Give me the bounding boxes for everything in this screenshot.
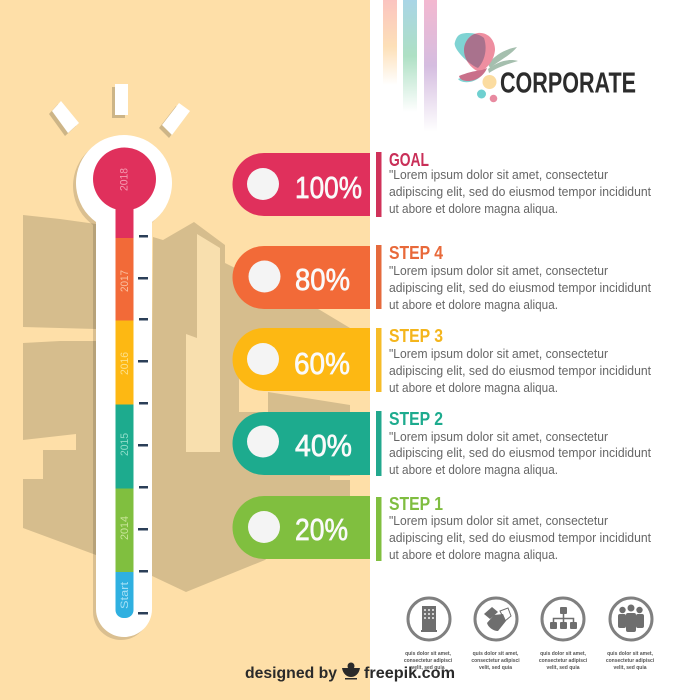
orange segment xyxy=(116,238,134,321)
caption 2: consectetur adipisci xyxy=(471,658,520,664)
text block: step 4: adipiscing elit, sed do eiusmod tempor incididunt xyxy=(389,281,652,295)
text block: step 4 xyxy=(376,243,652,312)
blue segment xyxy=(116,572,134,618)
pill: goal 100% xyxy=(233,153,370,216)
goal bulb xyxy=(93,148,156,210)
icon: freepik logo xyxy=(342,662,360,680)
red segment xyxy=(116,200,134,238)
year labels: 2014 xyxy=(119,516,131,540)
text block: step 1: STEP 1 xyxy=(389,494,443,514)
caption 3: consectetur adipisci xyxy=(539,658,588,664)
thermometer shadow xyxy=(73,138,169,640)
text block: step 3: "Lorem ipsum dolor sit amet, consectetur xyxy=(389,347,608,361)
logo xyxy=(455,33,636,102)
yellow segment xyxy=(116,320,134,404)
caption 4: consectetur adipisci xyxy=(606,658,655,664)
top gradient stripes xyxy=(383,0,437,132)
left background panel xyxy=(0,0,370,700)
caption 1: velit, sed quia xyxy=(411,665,445,671)
text block: step 4: ut abore et dolore magna aliqua. xyxy=(389,298,558,312)
pill: step 1 20%: 20% xyxy=(295,512,348,547)
pill: step 1 20% xyxy=(233,496,370,559)
year labels: 2015 xyxy=(119,433,131,456)
text block: step 2: "Lorem ipsum dolor sit amet, consectetur xyxy=(389,430,608,444)
caption 1: quis dolor sit amet, xyxy=(405,651,452,657)
pill: step 4 80% xyxy=(233,246,370,309)
attribution: freepik.com xyxy=(364,665,455,682)
teal segment xyxy=(116,404,134,488)
decorative rays xyxy=(49,84,190,138)
caption 2 xyxy=(471,651,520,671)
caption 4 xyxy=(606,651,655,671)
green segment xyxy=(116,488,134,572)
attribution: designed by xyxy=(245,665,337,682)
text block: step 1: ut abore et dolore magna aliqua. xyxy=(389,548,558,562)
text block: goal: GOAL xyxy=(389,150,429,170)
icon: people group xyxy=(610,598,652,640)
year labels: 2018 xyxy=(118,168,130,191)
icon: office building xyxy=(408,598,450,640)
text block: step 2 xyxy=(376,409,652,477)
text block: step 2: ut abore et dolore magna aliqua. xyxy=(389,463,558,477)
year labels: 2017 xyxy=(119,270,131,292)
text block: step 3: ut abore et dolore magna aliqua. xyxy=(389,381,558,395)
caption 2: quis dolor sit amet, xyxy=(473,651,519,657)
text block: step 2: STEP 2 xyxy=(389,409,443,429)
text block: goal: "Lorem ipsum dolor sit amet, consectetur xyxy=(389,168,608,182)
icon: org chart xyxy=(542,598,584,640)
caption 1 xyxy=(404,651,453,671)
caption 1: consectetur adipisci xyxy=(404,658,453,664)
text block: step 4: "Lorem ipsum dolor sit amet, consectetur xyxy=(389,264,608,278)
text block: step 1 xyxy=(376,494,652,562)
caption 4: quis dolor sit amet, xyxy=(607,651,654,657)
caption 3: quis dolor sit amet, xyxy=(540,651,587,657)
text block: step 4: STEP 4 xyxy=(389,243,443,263)
text block: step 3 xyxy=(376,326,652,395)
caption 2: velit, sed quia xyxy=(479,665,512,671)
text block: goal xyxy=(376,150,652,217)
icon: handshake xyxy=(475,598,517,640)
year labels: 2016 xyxy=(119,352,131,375)
text block: goal: adipiscing elit, sed do eiusmod tempor incididunt xyxy=(389,185,652,199)
building silhouette xyxy=(23,215,350,592)
right background panel xyxy=(370,0,700,700)
pill: step 3 60% xyxy=(233,328,370,391)
tick marks xyxy=(138,235,148,614)
caption 4: velit, sed quia xyxy=(613,665,647,671)
logo wordmark: CORPORATE xyxy=(500,68,636,100)
caption 3: velit, sed quia xyxy=(546,665,580,671)
pill: step 2 40%: 40% xyxy=(295,428,352,463)
thermometer xyxy=(73,135,172,640)
pill: step 2 40% xyxy=(233,412,370,475)
pill: step 3 60%: 60% xyxy=(294,346,350,381)
logo butterfly xyxy=(455,33,518,82)
text block: step 2: adipiscing elit, sed do eiusmod tempor incididunt xyxy=(389,446,652,460)
text block: step 1: "Lorem ipsum dolor sit amet, consectetur xyxy=(389,514,608,528)
caption 3 xyxy=(539,651,588,671)
logo dots xyxy=(482,75,496,89)
text block: step 3: STEP 3 xyxy=(389,326,443,346)
text block: step 1: adipiscing elit, sed do eiusmod tempor incididunt xyxy=(389,531,652,545)
year labels xyxy=(118,168,131,609)
pill: step 4 80%: 80% xyxy=(295,262,350,297)
text block: step 3: adipiscing elit, sed do eiusmod tempor incididunt xyxy=(389,364,652,378)
year labels: Start xyxy=(119,582,131,609)
attribution xyxy=(245,662,455,682)
pill: goal 100%: 100% xyxy=(295,170,362,205)
thermometer body xyxy=(76,135,172,637)
text block: goal: ut abore et dolore magna aliqua. xyxy=(389,202,558,216)
